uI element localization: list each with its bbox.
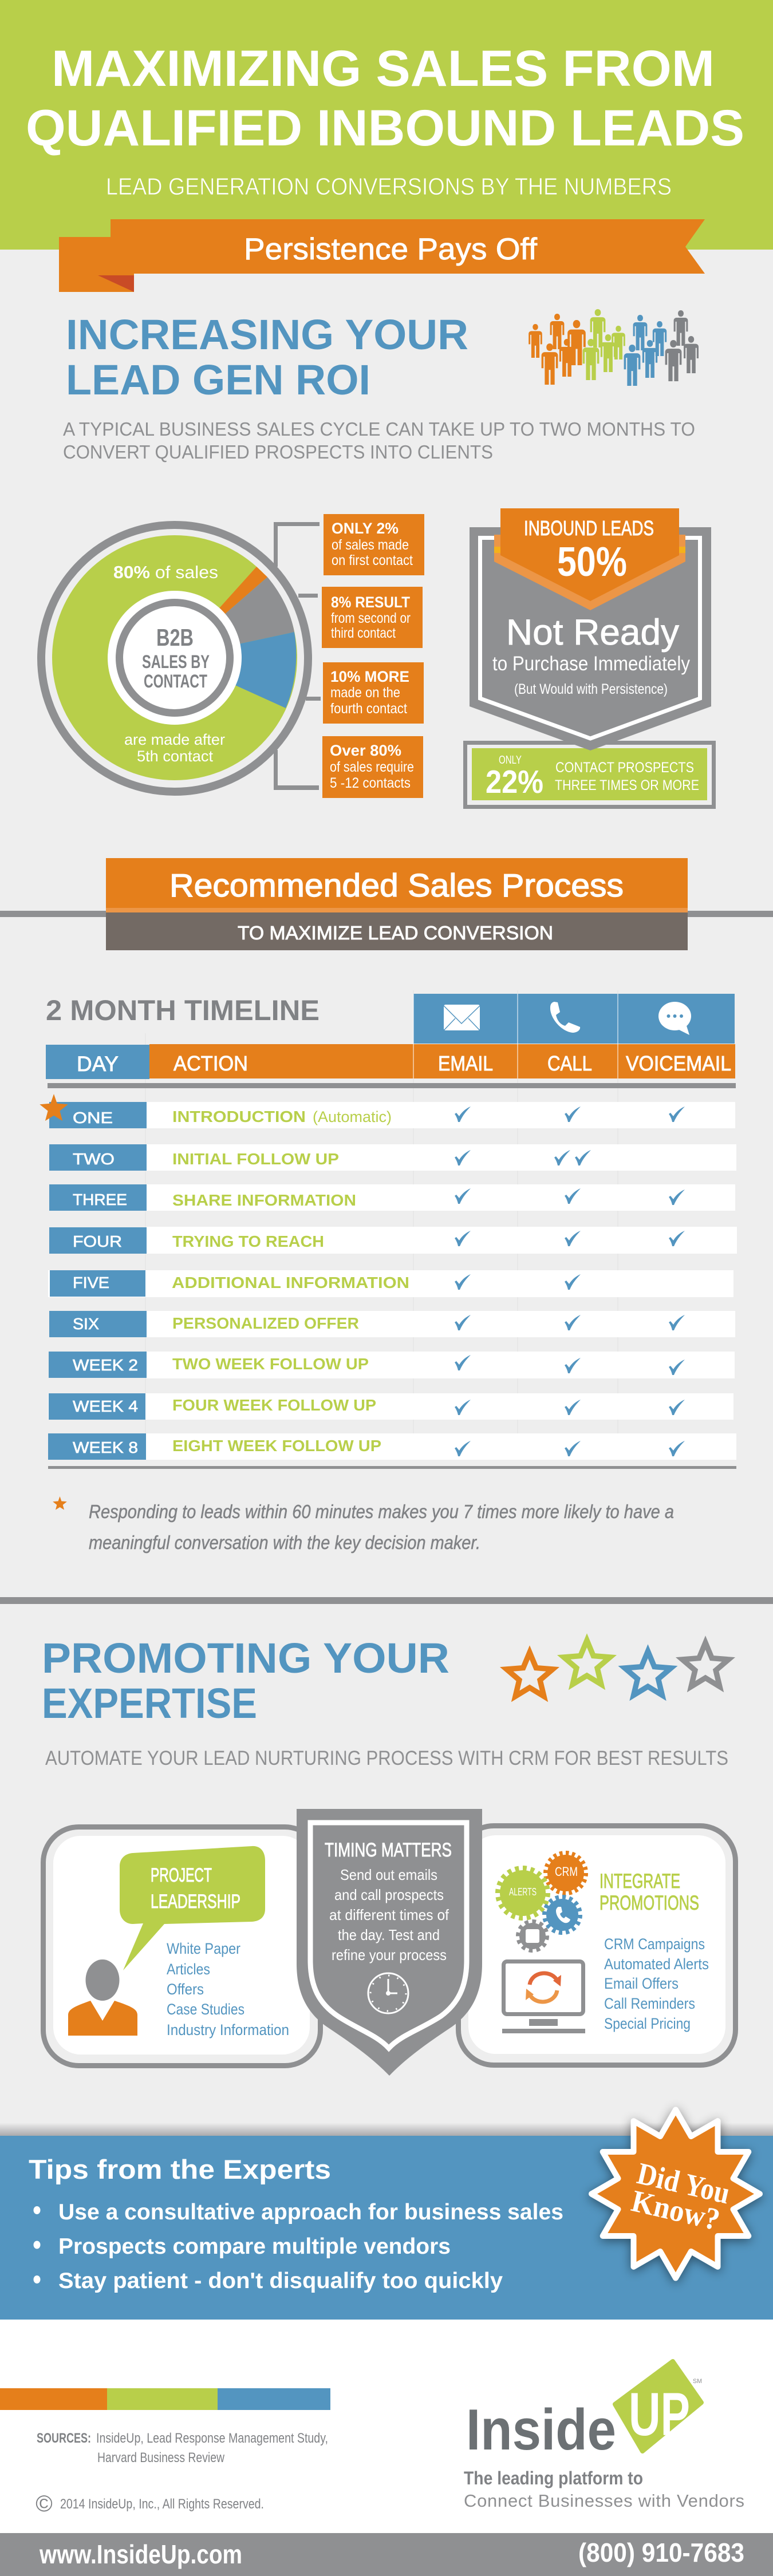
shield: timing matters: the day. Test and <box>338 1926 440 1943</box>
callout: 10% more: fourth contact <box>330 701 407 717</box>
shield: inbound leads not ready: to Purchase Immediately <box>492 653 690 675</box>
row: two: TWO <box>73 1150 115 1168</box>
callout: over 80% <box>322 736 423 798</box>
panel: 22% contact prospects: THREE TIMES OR MORE <box>555 777 699 793</box>
callout: only 2%: of sales made <box>332 537 409 553</box>
shield: inbound leads not ready <box>470 508 711 750</box>
row: four <box>49 1227 737 1254</box>
footnote with star <box>53 1496 674 1553</box>
table header icons <box>413 994 735 1044</box>
callout: 10% more: 10% MORE <box>330 668 409 685</box>
row: two: INITIAL FOLLOW UP <box>172 1150 339 1168</box>
row: five: ADDITIONAL INFORMATION <box>172 1274 409 1291</box>
table top rule <box>48 1083 736 1088</box>
slice: 8% <box>175 577 294 658</box>
gear: CRM: CRM <box>555 1864 578 1879</box>
intro text: CONVERT QUALIFIED PROSPECTS INTO CLIENTS <box>63 441 493 463</box>
row: three: THREE <box>73 1191 127 1208</box>
row: one: (Automatic) <box>313 1108 392 1125</box>
row: week 2: TWO WEEK FOLLOW UP <box>172 1355 369 1373</box>
gear: settings <box>518 1921 547 1951</box>
icon: four outlined stars <box>500 1633 735 1702</box>
callout: 8% result: from second or <box>331 610 411 626</box>
donut label bottom: are made after <box>124 731 225 748</box>
list: promotions: Special Pricing <box>604 2015 691 2032</box>
row: six: SIX <box>73 1315 99 1333</box>
table bottom rule <box>48 1466 736 1469</box>
row: week 8: EIGHT WEEK FOLLOW UP <box>172 1437 381 1455</box>
panel: 22% contact prospects <box>465 743 713 807</box>
speech bubble: PROJECT <box>151 1864 212 1886</box>
row: one <box>49 1102 735 1128</box>
donut centre text: CONTACT <box>144 671 207 692</box>
footer white panel <box>0 2320 773 2533</box>
list: content types: Articles <box>167 1961 210 1978</box>
logo: InsideUp <box>466 2361 702 2462</box>
banner: recommended sales process: TO MAXIMIZE LEAD CONVERSION <box>238 922 553 943</box>
icon: voicemail <box>658 1002 691 1035</box>
ribbon: persistence pays off <box>59 219 705 292</box>
tagline <box>464 2468 744 2511</box>
list: content types: Offers <box>167 1981 204 1998</box>
slice: 10% <box>175 632 296 708</box>
gear: phone <box>545 1897 580 1933</box>
row: week 4 <box>48 1393 733 1420</box>
pennant: inbound leads 50% <box>494 508 685 610</box>
icon: monitor with arrows <box>502 1961 585 2033</box>
footer bar: www.InsideUp.com <box>39 2539 242 2569</box>
heading: increasing your lead gen ROI <box>66 311 468 404</box>
panel: project leadership <box>44 1827 321 2065</box>
heading: promoting your expertise: EXPERTISE <box>42 1680 257 1727</box>
callout: 10% more <box>323 662 424 724</box>
row: week 2: WEEK 2 <box>73 1356 138 1374</box>
row: five <box>48 1270 733 1297</box>
intro text: A TYPICAL BUSINESS SALES CYCLE CAN TAKE UP TO TWO MONTHS TO <box>63 418 695 440</box>
row: week 4: FOUR WEEK FOLLOW UP <box>172 1396 376 1414</box>
title <box>26 39 744 156</box>
row: one: INTRODUCTION <box>172 1108 306 1125</box>
logo: InsideUp: SM <box>693 2378 702 2385</box>
starburst: did you know: Did You <box>634 2156 733 2211</box>
sources <box>37 2431 328 2466</box>
list: promotions: Call Reminders <box>604 1995 695 2012</box>
panel: 22% contact prospects: ONLY <box>499 754 522 767</box>
row: week 2 <box>49 1352 735 1378</box>
row: three <box>49 1184 735 1211</box>
tips list: Use a consultative approach for business sales <box>58 2200 563 2225</box>
starburst: did you know: Know? <box>628 2183 723 2237</box>
logo: InsideUp: Inside <box>466 2398 616 2462</box>
shield: inbound leads not ready: Not Ready <box>506 613 680 653</box>
heading: integrate promotions: PROMOTIONS <box>600 1892 699 1914</box>
tips list: Stay patient - don't disqualify too quickly <box>58 2269 503 2293</box>
table column lines <box>145 990 618 1433</box>
table header row <box>46 994 735 1079</box>
banner: recommended sales process: Recommended Sales Process <box>169 867 624 904</box>
gear: alerts: ALERTS <box>509 1886 537 1898</box>
sources: InsideUp, Lead Response Management Study, <box>96 2431 328 2446</box>
tagline: The leading platform to <box>464 2468 643 2488</box>
sources: Harvard Business Review <box>97 2450 225 2466</box>
footer bar: (800) 910-7683 <box>578 2538 744 2567</box>
connector brackets <box>274 522 321 790</box>
panel: tips from the experts: Tips from the Experts <box>29 2154 331 2184</box>
donut centre text <box>142 624 210 692</box>
tips list <box>33 2200 563 2293</box>
callout: 8% result: 8% RESULT <box>331 594 410 611</box>
shield: timing matters: TIMING MATTERS <box>325 1839 452 1861</box>
panel: tips from the experts <box>0 2136 773 2320</box>
heading: 2 month timeline: 2 MONTH TIMELINE <box>46 994 320 1026</box>
donut chart: B2B sales by contact <box>41 525 308 792</box>
heading: promoting your expertise <box>42 1634 449 1727</box>
tips list: Prospects compare multiple vendors <box>58 2234 451 2259</box>
list: content types: Industry Information <box>167 2021 289 2038</box>
callout: only 2%: on first contact <box>332 552 413 568</box>
list: content types <box>167 1940 289 2038</box>
icon: email <box>444 1005 480 1030</box>
footnote with star: meaningful conversation with the key decision maker. <box>89 1532 480 1553</box>
heading: increasing your lead gen ROI: INCREASING YOUR <box>66 311 468 358</box>
shield: timing matters: refine your process <box>332 1946 447 1963</box>
table header row: CALL <box>547 1052 592 1075</box>
list: promotions: Email Offers <box>604 1975 679 1992</box>
list: content types: Case Studies <box>167 2001 244 2018</box>
table header row: VOICEMAIL <box>626 1052 731 1075</box>
icon: orange star <box>40 1094 68 1121</box>
row: six: PERSONALIZED OFFER <box>172 1314 359 1332</box>
pennant: inbound leads 50%: 50% <box>557 539 627 585</box>
panel: integrate promotions <box>458 1826 735 2065</box>
section divider <box>0 1597 773 1604</box>
heading: integrate promotions: INTEGRATE <box>600 1870 680 1893</box>
sources: SOURCES: <box>37 2431 91 2446</box>
callout: 8% result <box>322 587 423 648</box>
title: MAXIMIZING SALES FROM <box>52 39 715 97</box>
heading: promoting your expertise: PROMOTING YOUR <box>42 1634 449 1682</box>
donut centre text: B2B <box>156 624 194 651</box>
row: week 8 <box>48 1433 736 1460</box>
title: QUALIFIED INBOUND LEADS <box>26 99 744 156</box>
row: one: ONE <box>73 1109 113 1127</box>
subtitle: LEAD GENERATION CONVERSIONS BY THE NUMBERS <box>106 173 672 200</box>
speech bubble <box>120 1846 265 1970</box>
heading: integrate promotions <box>600 1870 699 1914</box>
row: week 8: WEEK 8 <box>73 1439 138 1456</box>
divider behind banner <box>0 911 773 917</box>
table header row: EMAIL <box>438 1052 493 1075</box>
list: promotions: CRM Campaigns <box>604 1935 705 1953</box>
shield: inbound leads not ready: (But Would with Persistence) <box>514 681 668 697</box>
icon: crowd of people <box>529 309 699 386</box>
pennant: inbound leads 50%: INBOUND LEADS <box>524 516 654 540</box>
table header row: ACTION <box>173 1052 248 1075</box>
callout: 8% result: third contact <box>331 625 396 641</box>
panel: 22% contact prospects: CONTACT PROSPECTS <box>555 760 694 776</box>
row: six <box>49 1311 735 1337</box>
ribbon: persistence pays off: Persistence Pays Off <box>244 232 537 266</box>
footnote with star: Responding to leads within 60 minutes makes you 7 times more likely to have a <box>89 1501 674 1522</box>
header panel <box>0 0 773 250</box>
row: four: TRYING TO REACH <box>172 1232 324 1250</box>
row: four: FOUR <box>73 1232 122 1250</box>
panel: 22% contact prospects: 22% <box>486 764 543 800</box>
copyright: © <box>36 2491 53 2516</box>
table header row: DAY <box>77 1052 119 1076</box>
footer bar <box>0 2533 773 2576</box>
callout: over 80%: 5 -12 contacts <box>330 775 411 791</box>
callout: over 80%: Over 80% <box>330 742 401 759</box>
banner: recommended sales process <box>106 858 688 950</box>
callout: only 2% <box>324 514 424 575</box>
list: promotions <box>604 1935 709 2032</box>
icon: clock <box>368 1973 408 2013</box>
row: two <box>49 1144 736 1171</box>
icon: call <box>550 1002 580 1033</box>
logo: InsideUp: UP <box>629 2380 690 2448</box>
callout: over 80%: of sales require <box>330 759 414 775</box>
list: promotions: Automated Alerts <box>604 1955 709 1973</box>
callout: 10% more: made on the <box>330 685 400 701</box>
row: three: SHARE INFORMATION <box>172 1191 356 1209</box>
blue band shadow <box>0 2123 773 2136</box>
shield: timing matters: at different times of <box>329 1906 449 1923</box>
row: five: FIVE <box>73 1274 109 1291</box>
donut label top: 80% of sales <box>113 562 218 582</box>
shield: timing matters <box>297 1809 482 2076</box>
callout: only 2%: ONLY 2% <box>332 520 399 537</box>
starburst: did you know <box>591 2110 760 2278</box>
gear: CRM <box>546 1853 586 1893</box>
shield: timing matters: and call prospects <box>334 1886 444 1903</box>
row: week 4: WEEK 4 <box>73 1397 138 1415</box>
icon: person <box>68 1959 137 2036</box>
tagline: Connect Businesses with Vendors <box>464 2491 744 2511</box>
donut label bottom: 5th contact <box>137 748 213 765</box>
donut label bottom <box>124 731 225 765</box>
copyright: 2014 InsideUp, Inc., All Rights Reserved. <box>60 2496 264 2512</box>
shield: timing matters: Send out emails <box>340 1866 437 1883</box>
colour bars <box>0 2388 330 2410</box>
gear: alerts <box>498 1868 547 1918</box>
copyright <box>36 2491 264 2516</box>
heading: increasing your lead gen ROI: LEAD GEN ROI <box>66 356 370 404</box>
speech bubble: LEADERSHIP <box>151 1891 240 1913</box>
intro text <box>63 418 695 463</box>
slice: 2% <box>175 567 267 658</box>
donut centre text: SALES BY <box>142 651 210 672</box>
list: content types: White Paper <box>167 1940 240 1957</box>
